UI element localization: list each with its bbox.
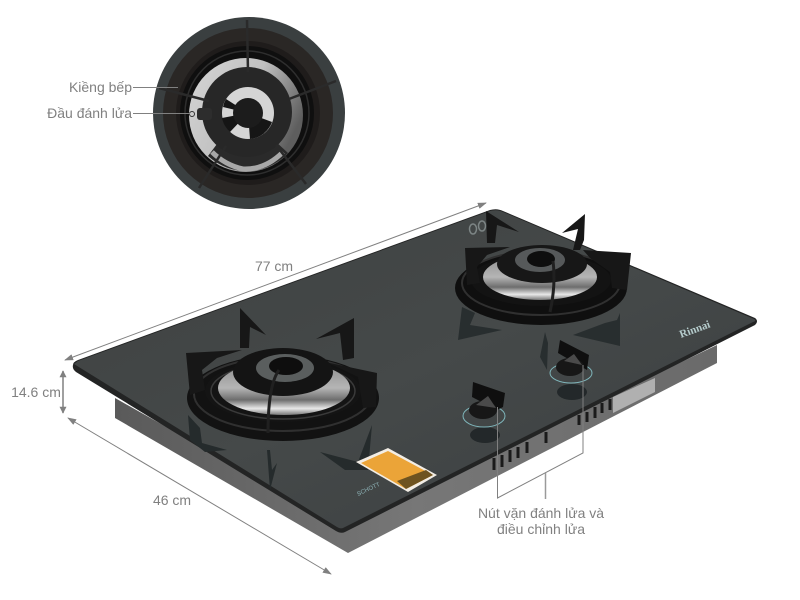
label: Đầu đánh lửa: Đầu đánh lửa [47, 105, 132, 121]
dimension: width 77 cm: 77 cm [255, 258, 293, 274]
left burner [186, 308, 379, 441]
dimension: height 14.6 cm [11, 371, 63, 413]
igniter [197, 108, 212, 120]
callout bracket: ignition knobs [498, 365, 583, 499]
pan supports [186, 308, 377, 408]
chrome burner ring [189, 58, 303, 172]
dimension: depth 46 cm [68, 418, 331, 574]
right burner reflection [458, 307, 620, 370]
dimension: width 77 cm [65, 203, 486, 360]
warranty sticker [356, 448, 437, 492]
brand logo: Rinnai [678, 319, 712, 341]
pan support fins [159, 20, 336, 188]
vent slots [494, 399, 610, 470]
knob: right [550, 340, 592, 400]
right burner [455, 211, 631, 325]
dimension: depth 46 cm: 46 cm [153, 492, 191, 508]
gas stove [73, 209, 757, 553]
label: ignition knobs: điều chỉnh lửa [497, 521, 585, 537]
knob: left [463, 382, 505, 443]
label: Kiềng bếp [69, 79, 178, 95]
glass logo near top corner [470, 221, 486, 234]
zoomed burner detail circle [153, 17, 345, 209]
small print on glass: SCHOTT [356, 482, 382, 498]
dimension: height 14.6 cm: 14.6 cm [11, 384, 61, 400]
pan supports [465, 211, 631, 290]
label: ignition knobs: Nút vặn đánh lửa và [478, 505, 604, 521]
left burner reflection [188, 415, 372, 490]
label: Kiềng bếp: Kiềng bếp [69, 79, 132, 95]
spec label on body [613, 378, 655, 413]
label: ignition knobs [478, 505, 604, 537]
stove body [115, 345, 717, 553]
glass top [73, 209, 757, 533]
